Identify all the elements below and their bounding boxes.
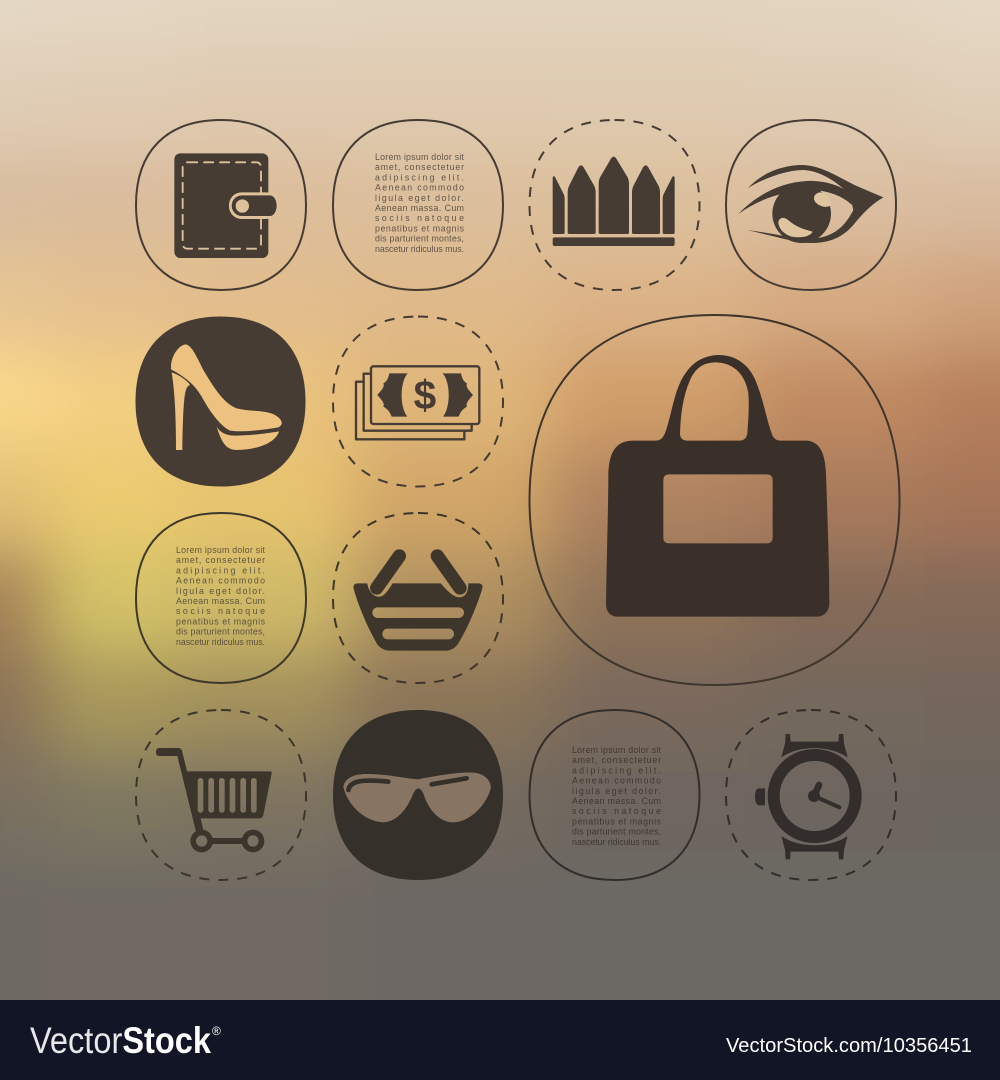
panel: money <box>333 316 503 486</box>
text block: sociis natoque <box>375 213 464 223</box>
text block: Lorem ipsum dolor sit <box>176 545 266 555</box>
icon: crown <box>553 157 675 246</box>
text block: adipiscing elit. <box>572 765 661 775</box>
icon: shopping basket <box>353 556 482 651</box>
icon: high heel shoe <box>171 344 282 450</box>
panel: watch <box>726 710 896 880</box>
text block <box>375 152 465 254</box>
text block <box>572 745 662 847</box>
text block: ligula eget dolor. <box>572 786 661 796</box>
icon: wristwatch <box>755 734 856 859</box>
registered mark: ® <box>212 1024 221 1038</box>
text block: ligula eget dolor. <box>375 193 464 203</box>
text block: Aenean commodo <box>375 183 464 193</box>
text block: amet, consectetuer <box>176 555 265 565</box>
text block: penatibus et magnis <box>176 616 266 626</box>
panel: shopping cart <box>136 710 306 880</box>
text block: Aenean massa. Cum <box>375 203 464 213</box>
text block: nascetur ridiculus mus. <box>176 637 265 647</box>
icon: banknotes <box>356 366 479 439</box>
text block: nascetur ridiculus mus. <box>375 244 464 254</box>
text block: adipiscing elit. <box>375 172 464 182</box>
text block: dis parturient montes, <box>572 827 661 837</box>
text block: amet, consectetuer <box>375 162 464 172</box>
text block: sociis natoque <box>176 606 265 616</box>
panel: wallet <box>136 120 306 290</box>
panel: crown <box>530 120 700 290</box>
text block: Aenean massa. Cum <box>572 796 661 806</box>
text block: dis parturient montes, <box>176 627 265 637</box>
text block: nascetur ridiculus mus. <box>572 837 661 847</box>
text block <box>176 545 266 647</box>
text block: Lorem ipsum dolor sit <box>572 745 662 755</box>
text block: Aenean commodo <box>572 776 661 786</box>
text block: Aenean massa. Cum <box>176 596 265 606</box>
panel: basket <box>333 513 503 683</box>
panel: shopping bag <box>530 315 900 685</box>
icon: eye <box>738 165 883 243</box>
text block: adipiscing elit. <box>176 565 265 575</box>
text block: amet, consectetuer <box>572 755 661 765</box>
text block: penatibus et magnis <box>572 816 662 826</box>
text block: dis parturient montes, <box>375 234 464 244</box>
panel: high heel <box>136 316 306 486</box>
text block: Aenean commodo <box>176 576 265 586</box>
footer image id: VectorStock.com/10356451 <box>726 1034 972 1057</box>
footer bar <box>0 1000 1000 1080</box>
panel: sunglasses <box>333 710 503 880</box>
panel: text block 2 <box>136 513 306 683</box>
panel: text block 3 <box>530 710 700 880</box>
icon: handbag <box>606 355 829 617</box>
text block: sociis natoque <box>572 806 661 816</box>
icon: banknotes: $ <box>414 372 437 418</box>
icon: wallet <box>174 153 279 258</box>
text block: penatibus et magnis <box>375 223 465 233</box>
icon: sunglasses <box>343 773 491 822</box>
panel: text block 1 <box>333 120 503 290</box>
panel: eye <box>726 120 896 290</box>
text block: ligula eget dolor. <box>176 586 265 596</box>
icon: shopping cart <box>156 748 272 852</box>
footer logo: VectorStock <box>30 1020 211 1061</box>
text block: Lorem ipsum dolor sit <box>375 152 465 162</box>
